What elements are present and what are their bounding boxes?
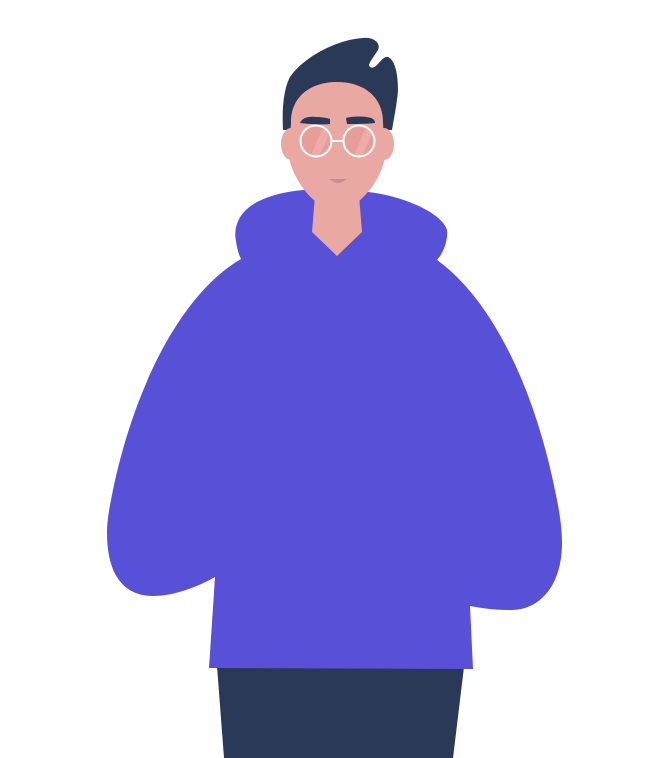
hair — [283, 38, 398, 130]
ear: left — [281, 128, 301, 160]
lens: left — [300, 126, 332, 156]
neck — [312, 195, 362, 256]
head — [281, 38, 398, 256]
lens: right — [344, 126, 374, 156]
mouth — [329, 179, 347, 183]
trousers — [217, 666, 464, 758]
frames — [300, 126, 374, 156]
hoodie — [107, 190, 562, 669]
lens shine: left — [312, 128, 329, 156]
face — [289, 82, 385, 201]
eyebrow: left — [300, 117, 330, 124]
eyebrow: right — [346, 116, 375, 124]
lens shine: right — [354, 128, 372, 156]
ear: right — [374, 128, 394, 160]
illustration: man in purple hoodie — [107, 38, 562, 758]
glasses — [300, 125, 374, 158]
